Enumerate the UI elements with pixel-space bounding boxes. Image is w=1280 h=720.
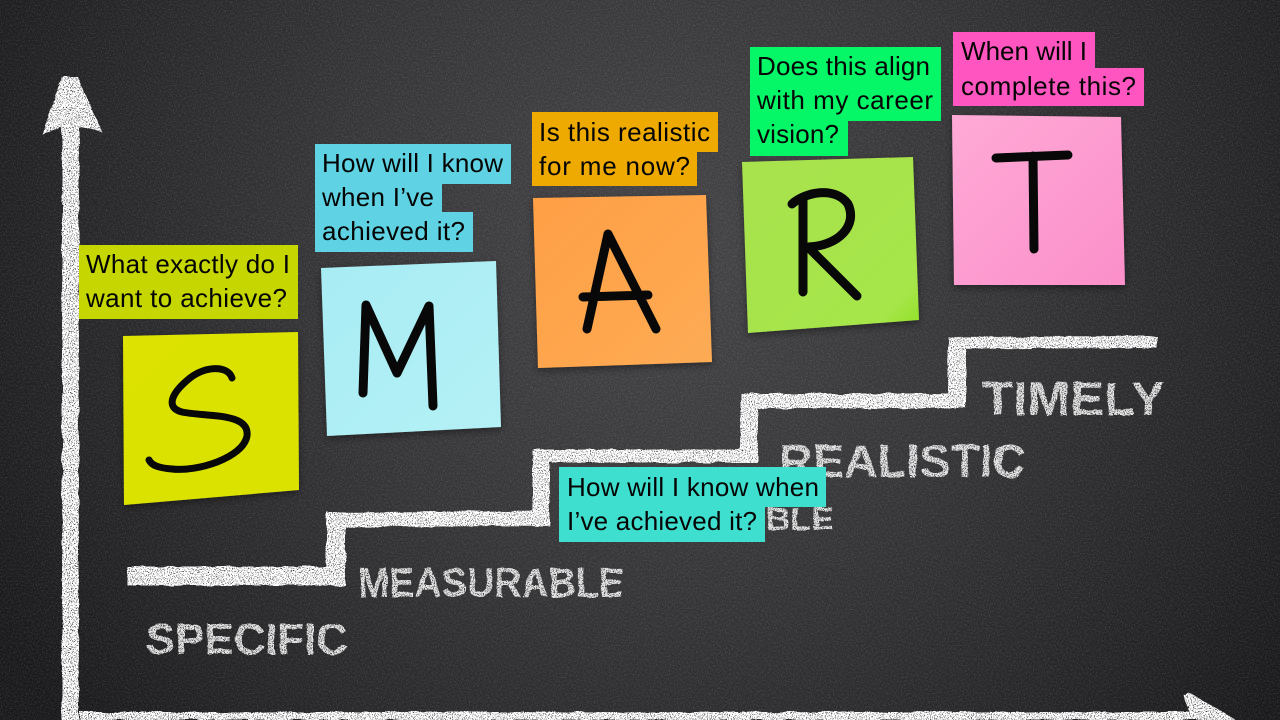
letter R bbox=[792, 193, 857, 296]
callout: what exactly bbox=[79, 245, 298, 319]
callout: is this realistic bbox=[532, 112, 718, 186]
callout: how will I know (achievable) bbox=[559, 467, 826, 542]
chalk label: achievable remnant: BLE bbox=[766, 501, 834, 537]
callout: how will I know (achievable): How will I know when bbox=[567, 472, 819, 502]
callout: how will I know (measurable): How will I know bbox=[322, 148, 503, 178]
vertical axis arrow bbox=[42, 76, 102, 720]
callout: how will I know (measurable): when I’ve bbox=[321, 182, 434, 212]
callout: when will I complete: When will I bbox=[961, 36, 1087, 66]
sticky note M bbox=[321, 261, 501, 436]
callout: does this align: with my career bbox=[756, 85, 933, 115]
callout: what exactly: want to achieve? bbox=[85, 283, 287, 313]
sticky note T bbox=[952, 115, 1125, 285]
callout: what exactly: What exactly do I bbox=[86, 249, 290, 279]
chalk label: specific: SPECIFIC bbox=[146, 615, 348, 664]
horizontal axis arrow bbox=[80, 692, 1236, 720]
chalk staircase line bbox=[127, 337, 1157, 585]
sticky note R bbox=[742, 157, 919, 333]
sticky note S bbox=[123, 332, 299, 505]
letter M bbox=[363, 305, 433, 406]
callout: does this align: vision? bbox=[757, 119, 839, 149]
callout: when will I complete: complete this? bbox=[961, 71, 1136, 101]
callout: how will I know (measurable): achieved it? bbox=[322, 216, 465, 246]
letter A bbox=[583, 234, 656, 329]
callout: does this align: Does this align bbox=[757, 51, 930, 81]
callout: is this realistic: for me now? bbox=[539, 151, 690, 181]
chalk label: realistic: REALISTIC bbox=[779, 435, 1026, 487]
letter T bbox=[996, 155, 1068, 249]
letter S bbox=[149, 369, 247, 469]
chalk label: measurable: MEASURABLE bbox=[358, 559, 624, 606]
callout: how will I know (measurable) bbox=[315, 144, 511, 252]
callout: how will I know (achievable): I’ve achieved it? bbox=[567, 506, 757, 536]
callout: does this align bbox=[750, 47, 941, 156]
sticky note A bbox=[533, 195, 712, 368]
callout: when will I complete bbox=[953, 32, 1144, 106]
chalk label: timely: TIMELY bbox=[982, 372, 1165, 425]
callout: is this realistic: Is this realistic bbox=[539, 117, 710, 147]
